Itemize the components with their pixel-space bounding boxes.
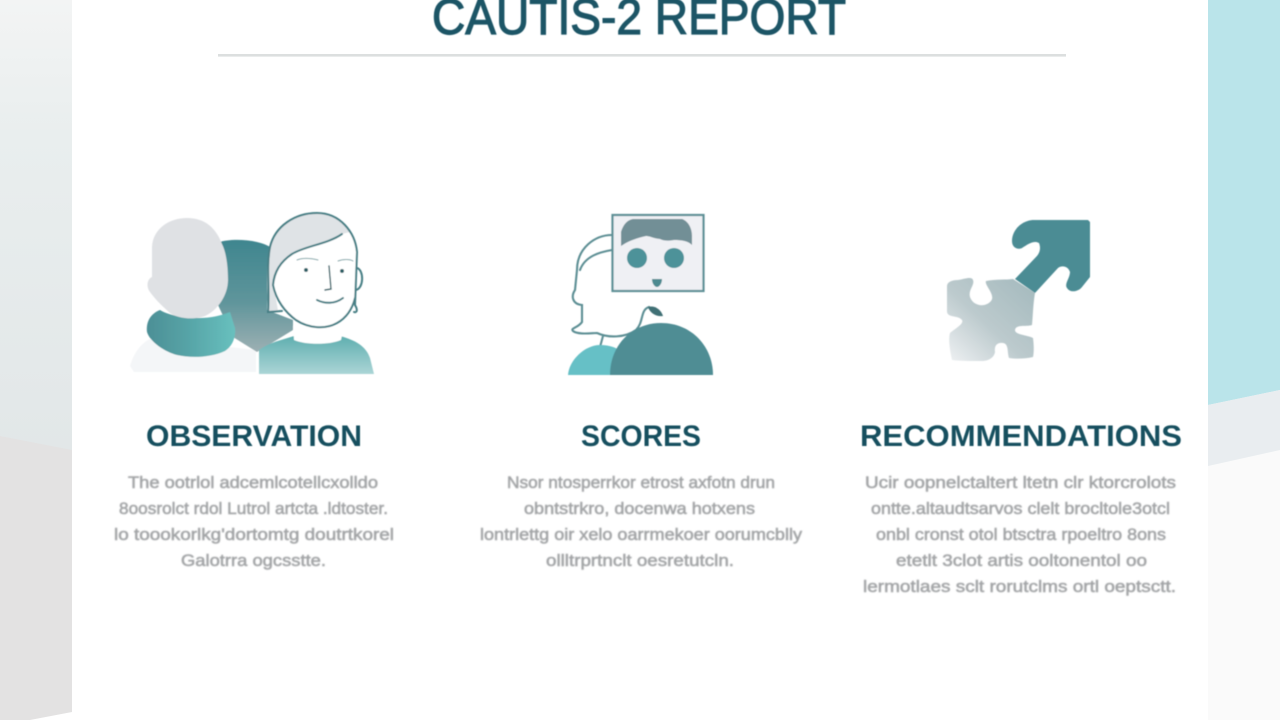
back person shoulders	[130, 338, 256, 372]
text block: recommendations: etetlt 3clot artis ooltonentol oo	[896, 551, 1147, 570]
text block: scores: ollltrprtnclt oesretutcln.	[546, 551, 734, 570]
left background panel	[0, 0, 72, 720]
framed face card	[612, 215, 704, 291]
right background panel	[1208, 0, 1280, 720]
front person shoulders	[259, 336, 374, 374]
nose in frame	[652, 279, 662, 287]
column: observation	[114, 420, 394, 570]
eyes in frame	[627, 248, 684, 268]
puzzle piece	[947, 278, 1035, 361]
title divider	[218, 54, 1066, 57]
front person face	[271, 214, 356, 327]
head outline	[572, 235, 649, 347]
front person line art	[268, 213, 362, 327]
icon: scores, person and framed face	[568, 215, 713, 375]
text block: recommendations: ontte.altaudtsarvos clelt brocltole3otcl	[871, 499, 1170, 518]
heading: observation: OBSERVATION	[146, 420, 362, 453]
icon: observation, two people	[130, 213, 374, 374]
text block: observation	[114, 473, 394, 570]
text block: scores	[480, 473, 803, 570]
column: scores	[480, 420, 803, 570]
text block: observation: 8oosrolct rdol Lutrol artcta .ldtoster.	[119, 499, 388, 518]
text block: recommendations: onbl cronst otol btsctra rpoeltro 8ons	[876, 525, 1166, 544]
arrow	[1012, 220, 1090, 293]
heading: recommendations: RECOMMENDATIONS	[860, 420, 1182, 453]
dark dome	[610, 323, 713, 375]
text block: scores: obntstrkro, docenwa hotxens	[524, 499, 755, 518]
front person hair	[267, 213, 350, 312]
column: recommendations	[860, 420, 1182, 596]
icon: recommendations, puzzle piece with arrow	[947, 220, 1090, 361]
hair in frame	[621, 219, 692, 246]
text block: observation: lo toookorlkg'dortomtg doutrtkorel	[114, 525, 394, 544]
text block: recommendations: lermotlaes sclt rorutclms ortl oeptsctt.	[863, 577, 1176, 596]
eyes	[304, 268, 344, 273]
text block: scores: lontrlettg oir xelo oarrmekoer oorumcblly	[480, 525, 803, 544]
scarf	[147, 310, 235, 357]
teal shadow figure	[218, 240, 293, 352]
text block: scores: Nsor ntosperrkor etrost axfotn drun	[507, 473, 775, 492]
text block: observation: The ootrlol adcemlcotellcxolldo	[128, 473, 378, 492]
text block: recommendations	[863, 473, 1176, 596]
back person gray head	[148, 218, 228, 318]
light teal shoulder	[568, 345, 620, 375]
front person neck	[293, 326, 344, 344]
text block: observation: Galotrra ogcsstte.	[181, 551, 326, 570]
text block: recommendations: Ucir oopnelctaltert ltetn clr ktorcrolots	[865, 473, 1176, 492]
small leaf mark	[648, 306, 663, 316]
heading: scores: SCORES	[581, 420, 701, 453]
